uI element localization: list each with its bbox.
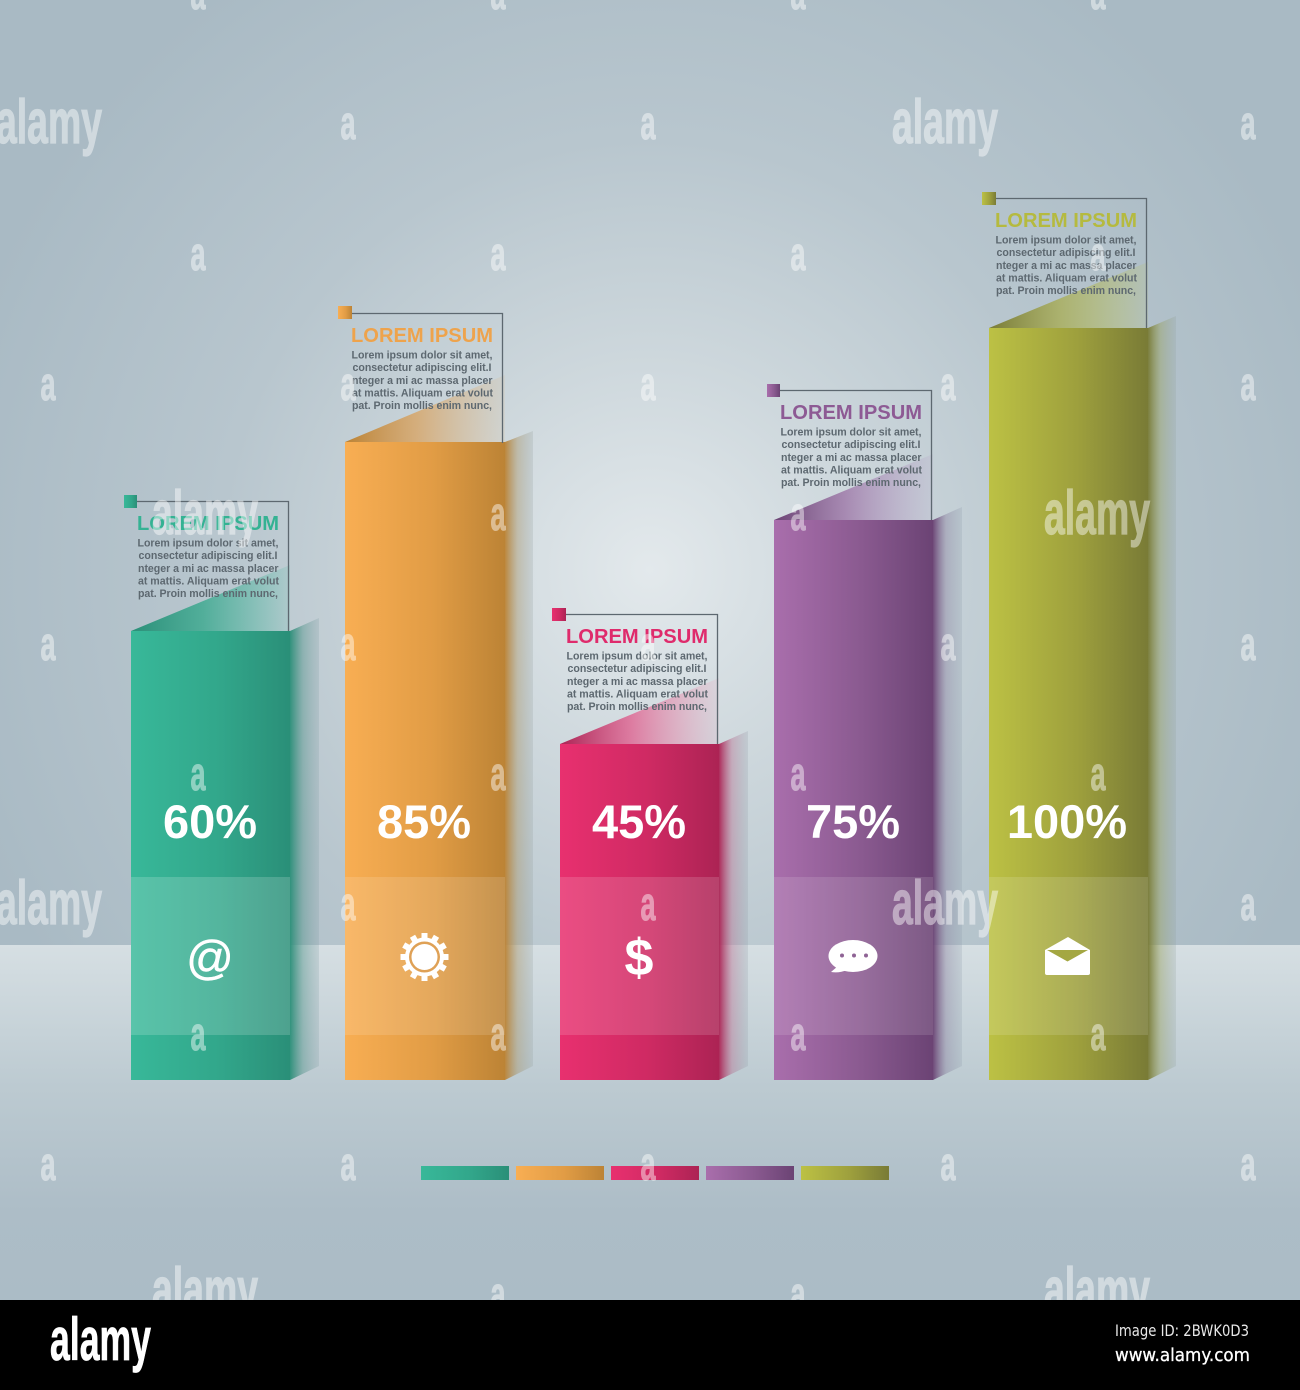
label: green column (124, 495, 288, 631)
icon: envelope (1045, 937, 1090, 975)
watermark text: a (790, 227, 806, 280)
watermark text: a (790, 1007, 806, 1060)
label: green column: at mattis. Aliquam erat volut (138, 576, 279, 588)
watermark text: a (490, 487, 506, 540)
colour legend strip (421, 1166, 889, 1180)
watermark text: a (190, 1007, 206, 1060)
label: orange column: Lorem ipsum dolor sit amet, (352, 350, 493, 362)
footer website: www.alamy.com (1115, 1345, 1250, 1366)
watermark text: a (340, 1137, 356, 1190)
watermark text: a (340, 357, 356, 410)
watermark text: a (1090, 227, 1106, 280)
watermark text: a (340, 96, 356, 149)
bar: green 60%: 60% (163, 795, 257, 848)
watermark text: a (940, 1137, 956, 1190)
label: olive column (982, 192, 1146, 328)
watermark text: a (1240, 357, 1256, 410)
watermark text: alamy (892, 88, 998, 157)
label: green column: pat. Proin mollis enim nunc, (138, 588, 278, 600)
watermark text: a (190, 747, 206, 800)
label: purple column (767, 384, 932, 520)
bar: magenta 45% (560, 678, 748, 1080)
footer image id: Image ID: 2BWK0D3 (1115, 1321, 1249, 1340)
icon: speech bubble (828, 940, 878, 972)
label: magenta column: consectetur adipiscing elit.I (568, 663, 707, 675)
watermark text: a (340, 877, 356, 930)
watermark text: a (640, 357, 656, 410)
bar: magenta 45%: 45% (592, 795, 686, 848)
watermark text: alamy (1044, 479, 1150, 548)
watermark text: a (490, 1267, 506, 1320)
bar: orange 85% (345, 375, 533, 1080)
label: magenta column: nteger a mi ac massa placer (567, 676, 708, 688)
label: orange column: LOREM IPSUM (351, 325, 493, 347)
label: olive column: consectetur adipiscing elit.I (996, 247, 1136, 259)
watermark text: a (40, 357, 56, 410)
bar: magenta 45%: $ (625, 929, 654, 987)
bar: purple 75%: 75% (806, 795, 900, 848)
watermark text: a (490, 747, 506, 800)
label: orange column (338, 306, 502, 443)
footer bar (0, 1300, 1300, 1390)
watermark text: a (790, 747, 806, 800)
label: olive column: LOREM IPSUM (995, 210, 1137, 232)
label: green column: LOREM IPSUM (137, 513, 279, 535)
label: olive column: at mattis. Aliquam erat volut (996, 272, 1137, 284)
watermark text: a (640, 617, 656, 670)
label: olive column: nteger a mi ac massa placer (996, 260, 1136, 272)
label: purple column: pat. Proin mollis enim nunc, (781, 477, 921, 489)
label: green column: Lorem ipsum dolor sit amet, (138, 538, 279, 550)
label: orange column: at mattis. Aliquam erat volut (352, 388, 493, 400)
watermark text: a (640, 877, 656, 930)
label: green column: nteger a mi ac massa placer (138, 563, 278, 575)
watermark text: a (940, 617, 956, 670)
bar: orange 85%: 85% (377, 795, 471, 848)
label: magenta column: at mattis. Aliquam erat volut (567, 688, 708, 700)
label: orange column: nteger a mi ac massa placer (352, 375, 492, 387)
watermark text: alamy (1044, 1256, 1150, 1325)
watermark text: alamy (0, 869, 102, 938)
label: olive column: Lorem ipsum dolor sit amet, (996, 234, 1137, 246)
label: purple column: Lorem ipsum dolor sit amet, (780, 426, 922, 438)
label: magenta column (552, 608, 718, 744)
watermark text: a (790, 1267, 806, 1320)
watermark text: a (640, 1137, 656, 1190)
watermark text: a (1240, 617, 1256, 670)
watermark text: a (40, 1137, 56, 1190)
label: magenta column: pat. Proin mollis enim nunc, (567, 701, 707, 713)
watermark text: a (40, 617, 56, 670)
background wall (0, 0, 1300, 945)
watermark text: a (490, 1007, 506, 1060)
bar: green 60% (131, 565, 319, 1080)
watermark text: a (190, 227, 206, 280)
watermark text: a (1240, 877, 1256, 930)
footer logo: alamy (50, 1306, 151, 1373)
label: magenta column: Lorem ipsum dolor sit amet, (566, 650, 708, 662)
bar: purple 75% (774, 454, 962, 1080)
label: orange column: pat. Proin mollis enim nunc, (352, 400, 492, 412)
watermark text: a (340, 617, 356, 670)
label: green column: consectetur adipiscing elit.I (138, 550, 278, 562)
label: purple column: LOREM IPSUM (780, 402, 922, 424)
label: olive column: pat. Proin mollis enim nunc, (996, 285, 1136, 297)
bar: olive 100%: 100% (1007, 795, 1127, 848)
label: purple column: nteger a mi ac massa placer (781, 452, 922, 464)
watermark text: a (790, 487, 806, 540)
watermark text: a (490, 227, 506, 280)
watermark text: alamy (152, 479, 258, 548)
watermark text: a (1240, 1137, 1256, 1190)
watermark text: a (1240, 96, 1256, 149)
label: magenta column: LOREM IPSUM (566, 626, 708, 648)
label: purple column: consectetur adipiscing elit.I (782, 439, 921, 451)
watermark text: a (1090, 1007, 1106, 1060)
watermark text: alamy (892, 869, 998, 938)
watermark text: a (1090, 747, 1106, 800)
bar: olive 100% (989, 262, 1176, 1080)
watermark text: a (940, 357, 956, 410)
bar: green 60%: @ (186, 931, 234, 984)
label: orange column: consectetur adipiscing elit.I (352, 362, 492, 374)
watermark text: a (640, 96, 656, 149)
watermark text: alamy (0, 88, 102, 157)
watermark text: alamy (152, 1256, 258, 1325)
label: purple column: at mattis. Aliquam erat volut (781, 464, 922, 476)
icon: gear (400, 933, 448, 981)
floor (0, 945, 1300, 1300)
